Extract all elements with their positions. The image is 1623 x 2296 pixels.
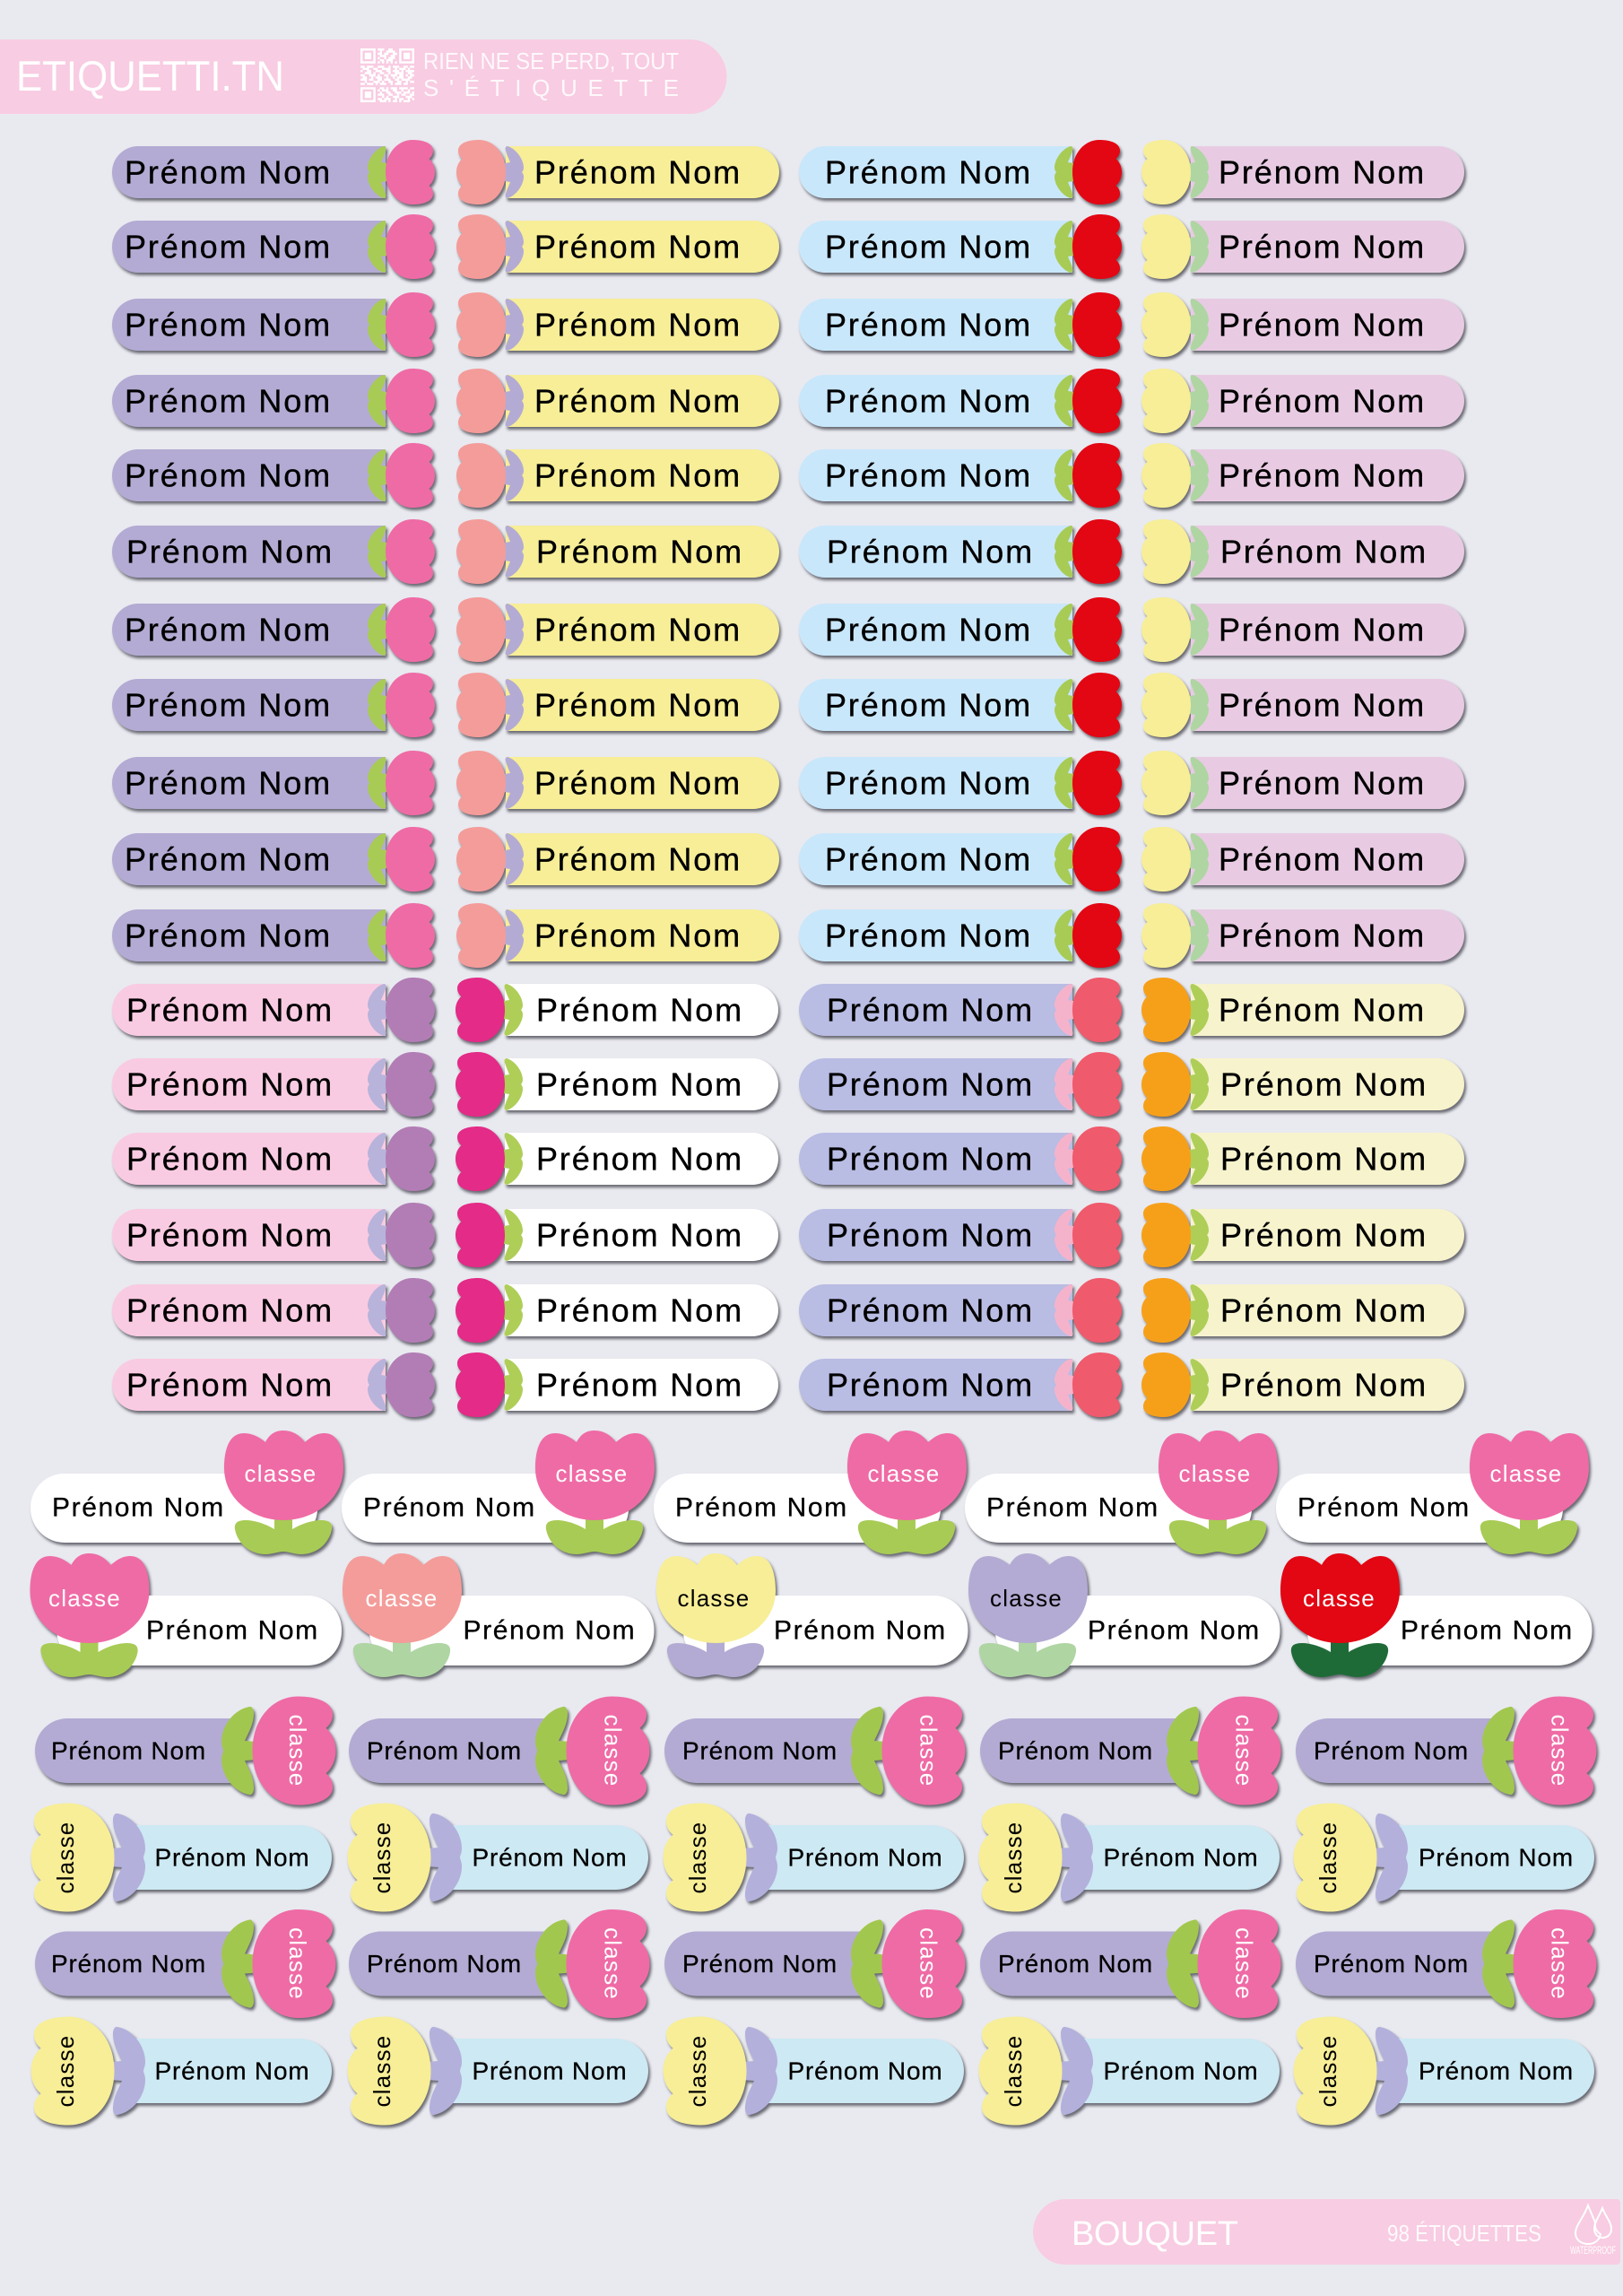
label r15 c2 bbox=[456, 1203, 778, 1267]
label r11 c2 bbox=[456, 903, 779, 968]
brand name: ETIQUETTI.TN bbox=[16, 52, 284, 100]
side label row 1 no 1 bbox=[35, 1697, 335, 1805]
label r8 c2 bbox=[456, 673, 779, 737]
side label row 3 no 4: Prénom Nom bbox=[998, 1950, 1153, 1978]
label r16 c3 bbox=[799, 1278, 1122, 1343]
label r3 c4: Prénom Nom bbox=[1219, 307, 1426, 343]
tagline: RIEN NE SE PERD, TOUT bbox=[423, 48, 679, 74]
side label row 2 no 3: Prénom Nom bbox=[787, 1844, 942, 1871]
label r15 c1: Prénom Nom bbox=[126, 1216, 334, 1254]
side label row 2 no 1: classe bbox=[52, 1822, 79, 1893]
side label row 4 no 2 bbox=[348, 2017, 648, 2125]
tulip label row 2 no 3 bbox=[656, 1553, 968, 1677]
label r14 c3: Prénom Nom bbox=[827, 1141, 1034, 1177]
label r11 c1: Prénom Nom bbox=[125, 917, 332, 954]
label r1 c2: Prénom Nom bbox=[534, 154, 742, 190]
label r15 c3: Prénom Nom bbox=[827, 1216, 1034, 1254]
tulip label row 1 no 5: Prénom Nom bbox=[1298, 1492, 1471, 1523]
label count: 98 ÉTIQUETTES bbox=[1387, 2220, 1541, 2247]
label r1 c4 bbox=[1141, 140, 1464, 204]
tulip label row 1 no 3: Prénom Nom bbox=[675, 1492, 848, 1523]
label r4 c2 bbox=[456, 369, 779, 433]
label r16 c4: Prénom Nom bbox=[1220, 1292, 1428, 1329]
label r5 c4: Prénom Nom bbox=[1219, 457, 1426, 493]
label r16 c1 bbox=[112, 1278, 435, 1343]
label r10 c1: Prénom Nom bbox=[125, 841, 332, 877]
label r9 c1: Prénom Nom bbox=[125, 764, 332, 802]
label r1 c4: Prénom Nom bbox=[1219, 154, 1426, 190]
side label row 4 no 2: Prénom Nom bbox=[472, 2057, 627, 2084]
label r17 c3: Prénom Nom bbox=[827, 1367, 1034, 1403]
tulip label row 1 no 2 bbox=[342, 1431, 655, 1554]
label r4 c1 bbox=[112, 369, 435, 433]
label r2 c3: Prénom Nom bbox=[825, 228, 1032, 265]
label r1 c1: Prénom Nom bbox=[125, 154, 332, 190]
tulip label row 2 no 1 bbox=[30, 1553, 342, 1677]
icon: waterproof drops bbox=[1575, 2205, 1611, 2244]
label r16 c2: Prénom Nom bbox=[536, 1292, 743, 1329]
side label row 4 no 1 bbox=[31, 2017, 332, 2125]
tulip label row 1 no 1: classe bbox=[245, 1460, 317, 1487]
label r7 c4 bbox=[1141, 597, 1464, 662]
label r8 c3 bbox=[799, 673, 1122, 737]
label r11 c3 bbox=[799, 903, 1122, 968]
footer banner bbox=[1033, 2199, 1620, 2265]
side label row 1 no 5: classe bbox=[1546, 1715, 1573, 1787]
label r3 c3: Prénom Nom bbox=[825, 307, 1032, 343]
label r15 c4: Prénom Nom bbox=[1220, 1216, 1428, 1254]
label r12 c4: Prénom Nom bbox=[1219, 992, 1426, 1028]
label r7 c2 bbox=[456, 597, 779, 662]
label r2 c2: Prénom Nom bbox=[534, 228, 742, 265]
tulip label row 2 no 2: classe bbox=[366, 1585, 438, 1612]
label r11 c4 bbox=[1141, 903, 1464, 968]
label r8 c1 bbox=[112, 673, 435, 737]
label r15 c3 bbox=[799, 1203, 1122, 1267]
label r14 c2 bbox=[456, 1126, 778, 1191]
label r2 c1: Prénom Nom bbox=[125, 228, 332, 265]
label r5 c4 bbox=[1141, 443, 1464, 508]
side label row 4 no 1: Prénom Nom bbox=[154, 2057, 309, 2084]
tulip label row 1 no 1: Prénom Nom bbox=[52, 1492, 225, 1523]
tagline second line: S'ÉTIQUETTE bbox=[423, 74, 679, 101]
side label row 4 no 5 bbox=[1294, 2017, 1594, 2125]
tulip label row 2 no 3: classe bbox=[678, 1585, 750, 1612]
label r7 c3 bbox=[799, 597, 1122, 662]
header banner bbox=[0, 39, 726, 114]
label r1 c3 bbox=[799, 140, 1122, 204]
label r13 c3: Prénom Nom bbox=[827, 1065, 1034, 1103]
label r4 c3 bbox=[799, 369, 1122, 433]
side label row 2 no 2 bbox=[348, 1804, 648, 1911]
label r6 c4: Prénom Nom bbox=[1220, 533, 1428, 570]
label r14 c1: Prénom Nom bbox=[126, 1141, 334, 1177]
side label row 4 no 4: Prénom Nom bbox=[1103, 2057, 1258, 2084]
label r3 c3 bbox=[799, 292, 1122, 357]
label r12 c1 bbox=[112, 978, 435, 1042]
side label row 4 no 4: classe bbox=[1000, 2035, 1027, 2107]
tulip label row 1 no 5 bbox=[1276, 1431, 1589, 1554]
side label row 1 no 2: Prénom Nom bbox=[367, 1736, 522, 1765]
label r14 c4 bbox=[1141, 1126, 1464, 1191]
tulip label row 1 no 3: classe bbox=[868, 1460, 940, 1487]
label r17 c3 bbox=[799, 1352, 1122, 1417]
label r10 c2 bbox=[456, 827, 779, 891]
side label row 3 no 2: Prénom Nom bbox=[367, 1950, 522, 1978]
side label row 2 no 2: classe bbox=[369, 1822, 395, 1893]
label r2 c2 bbox=[456, 214, 779, 279]
label r16 c1: Prénom Nom bbox=[126, 1292, 334, 1329]
label r12 c4 bbox=[1141, 978, 1464, 1042]
label r4 c2: Prénom Nom bbox=[534, 382, 742, 420]
label r14 c2: Prénom Nom bbox=[536, 1141, 743, 1177]
label r13 c2: Prénom Nom bbox=[536, 1065, 743, 1103]
label r4 c3: Prénom Nom bbox=[825, 382, 1032, 420]
side label row 1 no 3: Prénom Nom bbox=[682, 1736, 838, 1765]
label r5 c3 bbox=[799, 443, 1122, 508]
label r17 c4: Prénom Nom bbox=[1220, 1367, 1428, 1403]
label r3 c2 bbox=[456, 292, 779, 357]
tulip label row 2 no 4: classe bbox=[990, 1585, 1063, 1612]
side label row 4 no 3: classe bbox=[684, 2035, 711, 2107]
label r9 c1 bbox=[112, 751, 435, 815]
side label row 4 no 3: Prénom Nom bbox=[787, 2057, 942, 2084]
tulip label row 2 no 3: Prénom Nom bbox=[774, 1616, 947, 1645]
label r12 c1: Prénom Nom bbox=[126, 992, 334, 1028]
label r5 c2: Prénom Nom bbox=[534, 457, 742, 493]
side label row 3 no 4: classe bbox=[1230, 1927, 1257, 2000]
label r3 c1 bbox=[112, 292, 435, 357]
label r4 c1: Prénom Nom bbox=[125, 382, 332, 420]
tulip label row 2 no 4 bbox=[968, 1553, 1280, 1677]
side label row 1 no 4 bbox=[980, 1697, 1280, 1805]
label r8 c4 bbox=[1141, 673, 1464, 737]
side label row 3 no 3: Prénom Nom bbox=[682, 1950, 838, 1978]
label r6 c1 bbox=[112, 519, 435, 584]
side label row 2 no 5 bbox=[1294, 1804, 1594, 1911]
side label row 1 no 4: classe bbox=[1230, 1715, 1257, 1787]
label r7 c2: Prénom Nom bbox=[534, 612, 742, 648]
label r9 c4: Prénom Nom bbox=[1219, 764, 1426, 802]
label r7 c4: Prénom Nom bbox=[1219, 612, 1426, 648]
label r13 c4 bbox=[1141, 1052, 1464, 1117]
label r11 c3: Prénom Nom bbox=[825, 917, 1032, 954]
side label row 1 no 5: Prénom Nom bbox=[1314, 1736, 1469, 1765]
label r5 c1: Prénom Nom bbox=[125, 457, 332, 493]
label r9 c3: Prénom Nom bbox=[825, 764, 1032, 802]
label r17 c4 bbox=[1141, 1352, 1464, 1417]
side label row 4 no 1: classe bbox=[52, 2035, 79, 2107]
label r3 c1: Prénom Nom bbox=[125, 307, 332, 343]
label r10 c1 bbox=[112, 827, 435, 891]
tulip label row 2 no 1: classe bbox=[48, 1585, 121, 1612]
label r15 c2: Prénom Nom bbox=[536, 1216, 743, 1254]
label r1 c2 bbox=[456, 140, 779, 204]
side label row 3 no 1: classe bbox=[284, 1927, 311, 2000]
collection name: BOUQUET bbox=[1072, 2215, 1238, 2253]
tulip label row 2 no 5 bbox=[1280, 1553, 1593, 1677]
label r7 c3: Prénom Nom bbox=[825, 612, 1032, 648]
side label row 1 no 4: Prénom Nom bbox=[998, 1736, 1153, 1765]
tulip label row 2 no 5: classe bbox=[1303, 1585, 1376, 1612]
label r5 c3: Prénom Nom bbox=[825, 457, 1032, 493]
label r2 c1 bbox=[112, 214, 435, 279]
label r9 c4 bbox=[1141, 751, 1464, 815]
tulip label row 1 no 2: classe bbox=[556, 1460, 628, 1487]
side label row 4 no 2: classe bbox=[369, 2035, 395, 2107]
label r6 c2 bbox=[456, 519, 779, 584]
label r12 c3 bbox=[799, 978, 1122, 1042]
label r8 c1: Prénom Nom bbox=[125, 687, 332, 723]
side label row 3 no 2 bbox=[349, 1909, 649, 2018]
side label row 2 no 5: classe bbox=[1315, 1822, 1341, 1893]
label r16 c4 bbox=[1141, 1278, 1464, 1343]
label r4 c4 bbox=[1141, 369, 1464, 433]
label r8 c2: Prénom Nom bbox=[534, 687, 742, 723]
label r5 c1 bbox=[112, 443, 435, 508]
side label row 2 no 3: classe bbox=[684, 1822, 711, 1893]
label r7 c1 bbox=[112, 597, 435, 662]
label r12 c3: Prénom Nom bbox=[827, 992, 1034, 1028]
label r5 c2 bbox=[456, 443, 779, 508]
side label row 3 no 1: Prénom Nom bbox=[51, 1950, 206, 1978]
tulip label row 2 no 2: Prénom Nom bbox=[463, 1616, 636, 1645]
label r6 c3: Prénom Nom bbox=[827, 533, 1034, 570]
side label row 3 no 1 bbox=[35, 1909, 335, 2018]
label r14 c1 bbox=[112, 1126, 435, 1191]
label r3 c2: Prénom Nom bbox=[534, 307, 742, 343]
tulip label row 2 no 5: Prénom Nom bbox=[1401, 1616, 1574, 1645]
label r6 c1: Prénom Nom bbox=[126, 533, 334, 570]
label r17 c2: Prénom Nom bbox=[536, 1367, 743, 1403]
label r6 c4 bbox=[1141, 519, 1464, 584]
side label row 2 no 4: Prénom Nom bbox=[1103, 1844, 1258, 1871]
label r1 c3: Prénom Nom bbox=[825, 154, 1032, 190]
label r15 c4 bbox=[1141, 1203, 1464, 1267]
label r11 c4: Prénom Nom bbox=[1219, 917, 1426, 954]
side label row 1 no 1: classe bbox=[284, 1715, 311, 1787]
side label row 3 no 5: classe bbox=[1546, 1927, 1573, 2000]
label r2 c4: Prénom Nom bbox=[1219, 228, 1426, 265]
tulip label row 2 no 2 bbox=[343, 1553, 655, 1677]
side label row 1 no 2 bbox=[349, 1697, 649, 1805]
label r10 c3 bbox=[799, 827, 1122, 891]
label r14 c3 bbox=[799, 1126, 1122, 1191]
tulip label row 1 no 1 bbox=[30, 1431, 343, 1554]
side label row 3 no 4 bbox=[980, 1909, 1280, 2018]
side label row 1 no 1: Prénom Nom bbox=[51, 1736, 206, 1765]
tulip label row 1 no 4 bbox=[965, 1431, 1278, 1554]
tulip label row 1 no 4: Prénom Nom bbox=[986, 1492, 1159, 1523]
label r10 c4: Prénom Nom bbox=[1219, 841, 1426, 877]
tulip label row 1 no 3 bbox=[654, 1431, 967, 1554]
side label row 3 no 5: Prénom Nom bbox=[1314, 1950, 1469, 1978]
label r14 c4: Prénom Nom bbox=[1220, 1141, 1428, 1177]
side label row 3 no 3 bbox=[664, 1909, 965, 2018]
label r9 c3 bbox=[799, 751, 1122, 815]
label r2 c4 bbox=[1141, 214, 1464, 279]
label r1 c1 bbox=[112, 140, 435, 204]
label r17 c1: Prénom Nom bbox=[126, 1367, 334, 1403]
side label row 2 no 4: classe bbox=[1000, 1822, 1027, 1893]
side label row 4 no 4 bbox=[979, 2017, 1280, 2125]
label r3 c4 bbox=[1141, 292, 1464, 357]
tulip label row 1 no 5: classe bbox=[1490, 1460, 1562, 1487]
label r13 c3 bbox=[799, 1052, 1122, 1117]
tulip label row 2 no 1: Prénom Nom bbox=[146, 1616, 319, 1645]
side label row 2 no 1 bbox=[31, 1804, 332, 1911]
label r13 c2 bbox=[456, 1052, 778, 1117]
section: sideways flower labels bbox=[31, 1697, 1596, 2125]
label r2 c3 bbox=[799, 214, 1122, 279]
label r16 c2 bbox=[456, 1278, 778, 1343]
side label row 3 no 3: classe bbox=[915, 1927, 942, 2000]
label r10 c3: Prénom Nom bbox=[825, 841, 1032, 877]
label r12 c2: Prénom Nom bbox=[536, 992, 743, 1028]
label r6 c2: Prénom Nom bbox=[536, 533, 743, 570]
side label row 3 no 5 bbox=[1296, 1909, 1596, 2018]
label r13 c1 bbox=[112, 1052, 435, 1117]
tulip label row 1 no 2: Prénom Nom bbox=[363, 1492, 536, 1523]
label r6 c3 bbox=[799, 519, 1122, 584]
label r13 c4: Prénom Nom bbox=[1220, 1065, 1428, 1103]
label r8 c4: Prénom Nom bbox=[1219, 687, 1426, 723]
side label row 1 no 5 bbox=[1296, 1697, 1596, 1805]
tulip label row 2 no 4: Prénom Nom bbox=[1088, 1616, 1261, 1645]
label r11 c2: Prénom Nom bbox=[534, 917, 742, 954]
side label row 2 no 3 bbox=[664, 1804, 964, 1911]
side label row 1 no 3 bbox=[664, 1697, 965, 1805]
label r11 c1 bbox=[112, 903, 435, 968]
tulip label row 1 no 4: classe bbox=[1179, 1460, 1251, 1487]
side label row 1 no 3: classe bbox=[915, 1715, 942, 1787]
label r10 c4 bbox=[1141, 827, 1464, 891]
side label row 4 no 5: Prénom Nom bbox=[1419, 2057, 1574, 2084]
label r13 c1: Prénom Nom bbox=[126, 1065, 334, 1103]
side label row 1 no 2: classe bbox=[599, 1715, 626, 1787]
side label row 2 no 4 bbox=[979, 1804, 1280, 1911]
label r10 c2: Prénom Nom bbox=[534, 841, 742, 877]
section: upright tulip labels bbox=[30, 1431, 1593, 1677]
label r12 c2 bbox=[456, 978, 778, 1042]
label r17 c1 bbox=[112, 1352, 435, 1417]
side label row 2 no 2: Prénom Nom bbox=[472, 1844, 627, 1871]
label r8 c3: Prénom Nom bbox=[825, 687, 1032, 723]
side label row 3 no 2: classe bbox=[599, 1927, 626, 2000]
label r17 c2 bbox=[456, 1352, 778, 1417]
label r7 c1: Prénom Nom bbox=[125, 612, 332, 648]
section: small flower labels bbox=[112, 140, 1464, 1417]
label r4 c4: Prénom Nom bbox=[1219, 382, 1426, 420]
side label row 2 no 1: Prénom Nom bbox=[154, 1844, 309, 1871]
side label row 4 no 5: classe bbox=[1315, 2035, 1341, 2107]
label r16 c3: Prénom Nom bbox=[827, 1292, 1034, 1329]
label r15 c1 bbox=[112, 1203, 435, 1267]
QR code bbox=[360, 48, 414, 102]
side label row 2 no 5: Prénom Nom bbox=[1419, 1844, 1574, 1871]
side label row 4 no 3 bbox=[664, 2017, 964, 2125]
label r9 c2 bbox=[456, 751, 779, 815]
label r9 c2: Prénom Nom bbox=[534, 764, 742, 802]
